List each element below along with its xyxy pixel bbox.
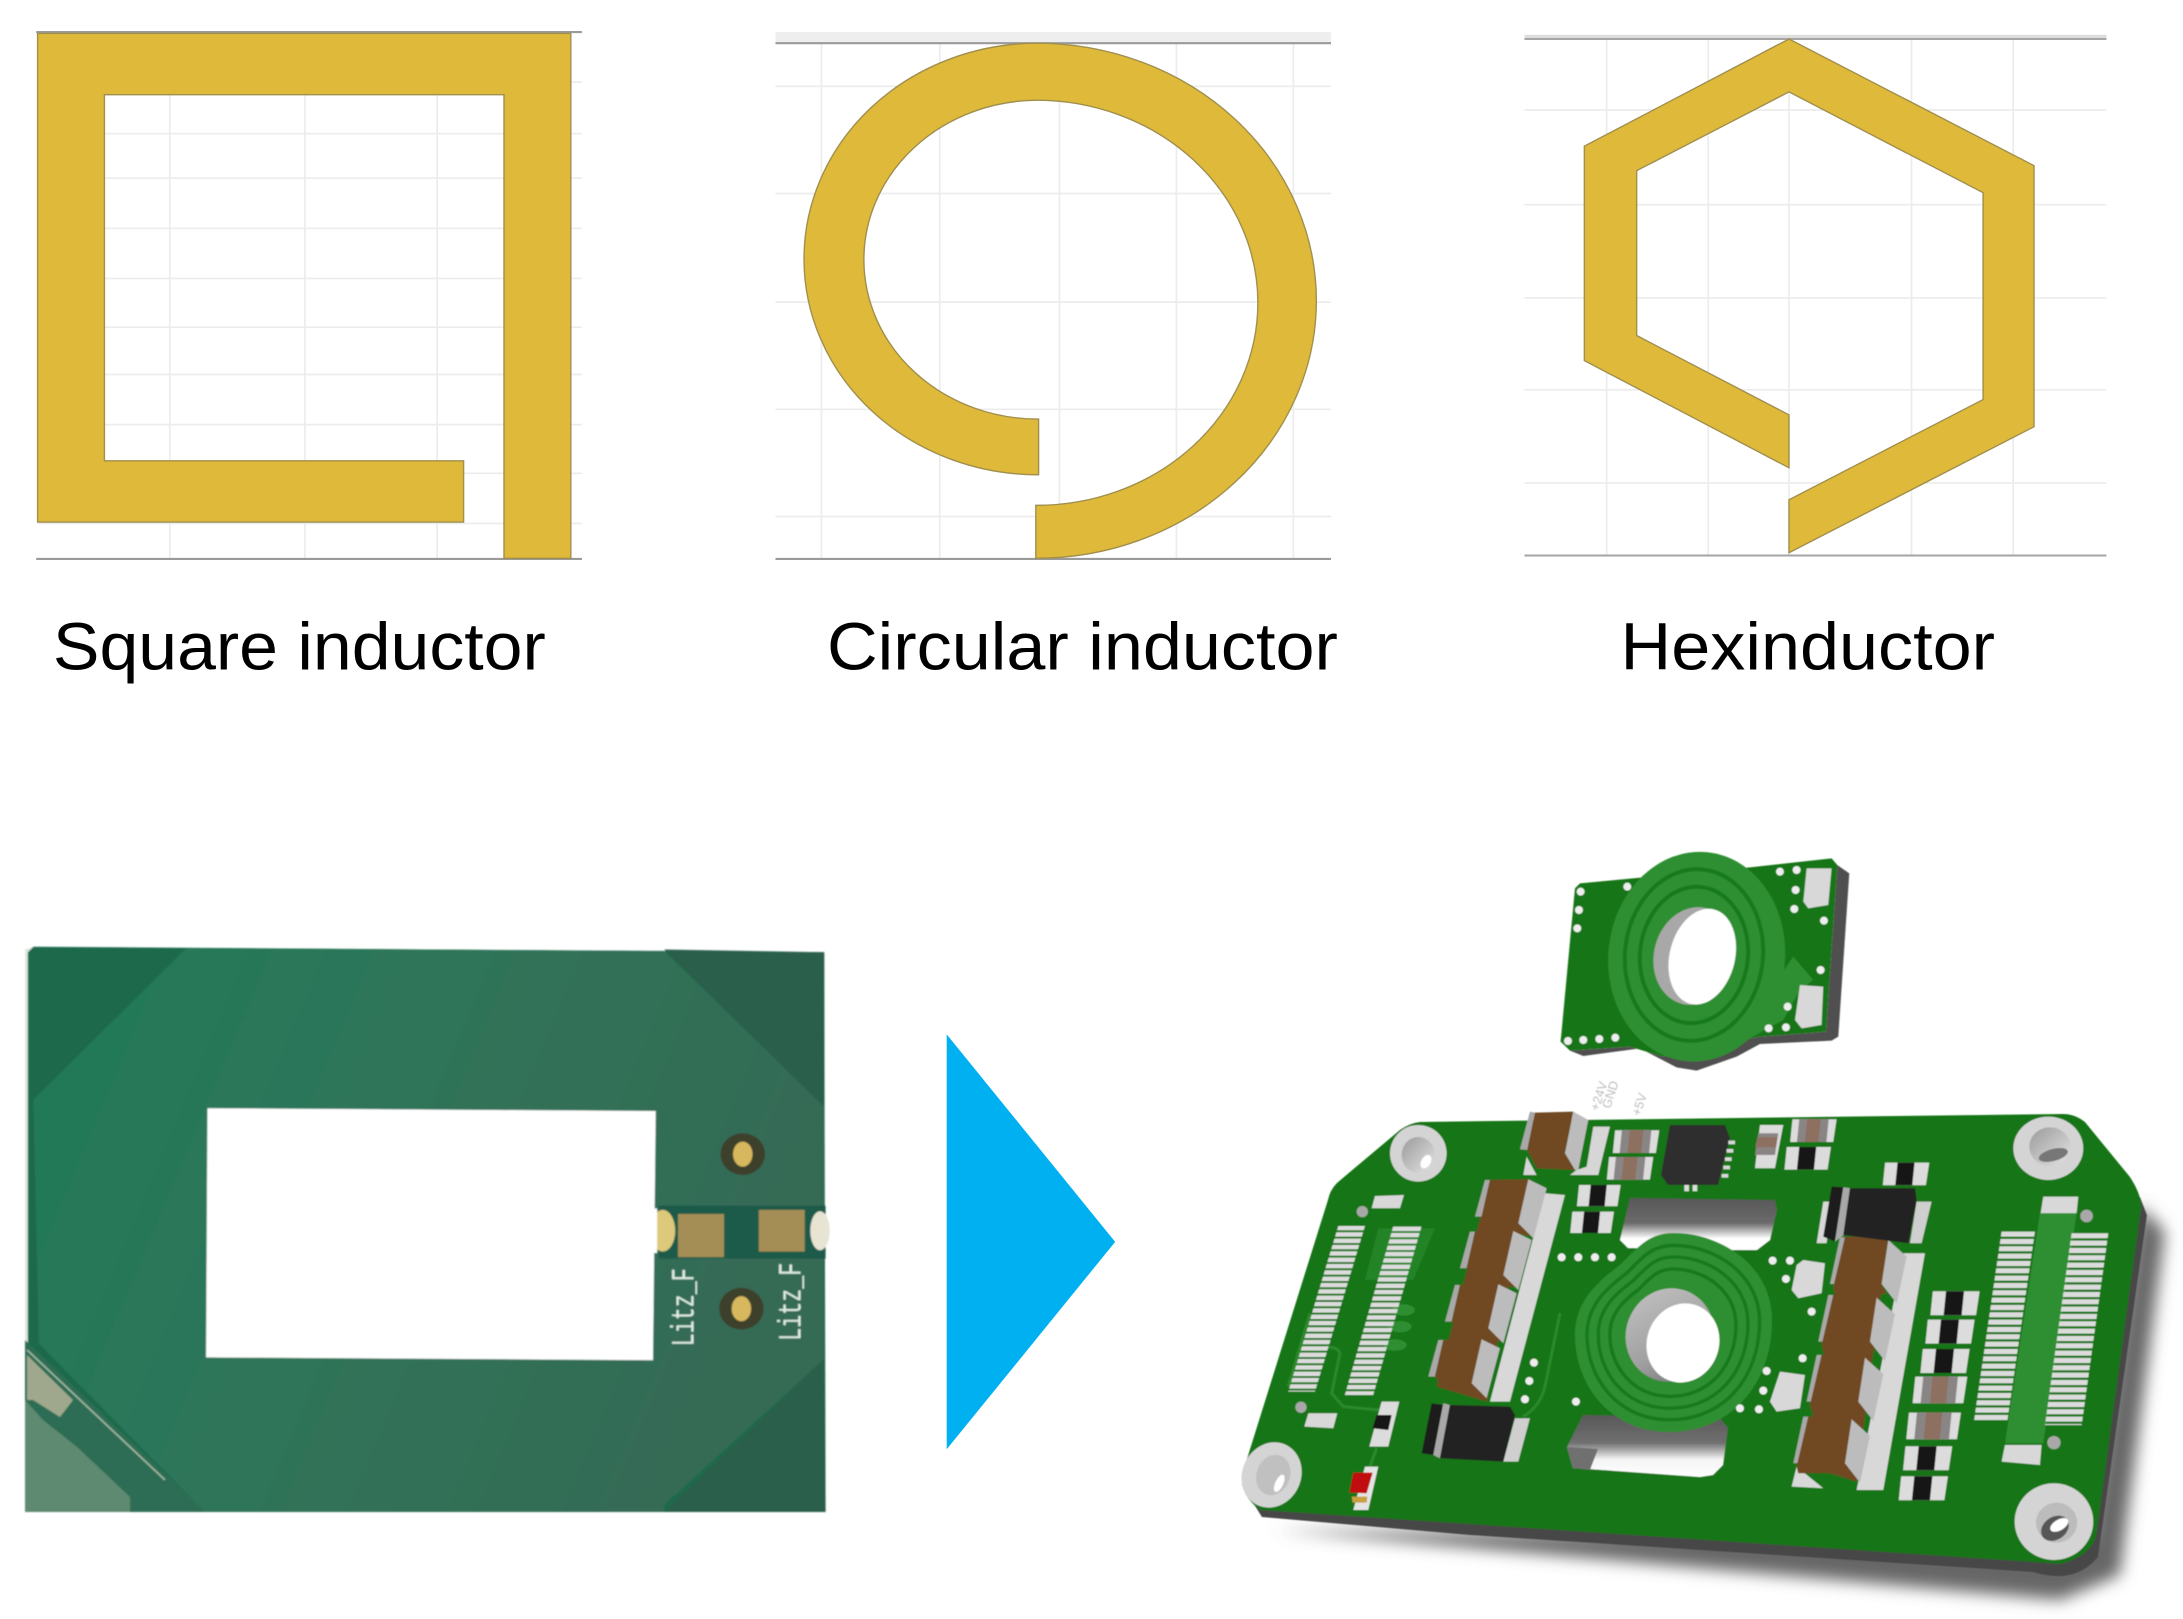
tiny connector labels <box>1588 1079 1650 1118</box>
silk and trace details <box>1288 1228 1560 1467</box>
left capacitor strip <box>1490 1193 1565 1402</box>
render: 3D PCB assembly <box>1231 843 2165 1600</box>
small pads and dots <box>1295 1195 1616 1428</box>
right half hole <box>810 1211 830 1250</box>
left half hole <box>649 1208 675 1253</box>
right capacitor column <box>1793 1237 1907 1483</box>
module pads <box>1795 868 1832 1028</box>
top right dark corner <box>664 949 824 1107</box>
label: circular inductor: Circular inductor <box>827 611 1338 685</box>
module coil <box>1598 843 1813 1070</box>
left capacitor column <box>1428 1179 1547 1398</box>
center coil <box>1575 1233 1772 1432</box>
tiny connector labels: +5V <box>1629 1091 1650 1118</box>
hexagonal inductor axis lines <box>1524 35 2106 555</box>
IC pins lower <box>1684 1184 1697 1191</box>
center IC <box>1661 1125 1730 1185</box>
connector end pads <box>2002 1197 2093 1465</box>
bottom slot <box>1567 1415 1728 1477</box>
red LED <box>1349 1467 1378 1510</box>
left capacitor brown backing <box>1437 1179 1528 1402</box>
terminal band <box>659 1206 826 1259</box>
small SMD parts right <box>1784 1119 1980 1500</box>
drop shadow <box>1275 1205 2165 1600</box>
hexagonal inductor trace <box>1584 39 2034 553</box>
left half of board components <box>1231 1112 1697 1518</box>
center cutout <box>206 1108 656 1360</box>
circular inductor trace <box>804 43 1316 558</box>
right half of board components <box>1722 1117 2093 1560</box>
left connector combs <box>1302 1226 1407 1395</box>
right connector combs <box>1991 1213 2090 1443</box>
module hole opening <box>1659 902 1746 1012</box>
bottom left glare corner <box>25 1340 205 1512</box>
mounting hole bottom left <box>1231 1432 1312 1518</box>
module vias <box>1564 866 1828 1045</box>
left pad <box>678 1214 724 1257</box>
upper via <box>720 1133 765 1175</box>
top slot <box>1620 1198 1777 1250</box>
panel: square inductor <box>36 32 582 559</box>
lower via <box>719 1288 764 1330</box>
arrow <box>947 1034 1115 1449</box>
right MOSFET <box>1817 1187 1932 1243</box>
circular inductor axis lines <box>775 32 1331 559</box>
octagonal coil layer <box>33 948 824 1512</box>
square inductor trace <box>38 33 571 558</box>
silkscreen right: Litz_F <box>774 1263 811 1341</box>
hexagonal inductor grid <box>1524 39 2106 555</box>
silkscreen left: Litz_F <box>666 1268 703 1346</box>
board base <box>28 947 826 1512</box>
coil hole opening <box>1635 1293 1730 1393</box>
right capacitor bottom pad <box>1792 1467 1823 1488</box>
mounting hole top left <box>1380 1115 1457 1192</box>
module side <box>1570 865 1849 1071</box>
mounting hole bottom right <box>2015 1483 2093 1560</box>
tiny connector labels: +24V <box>1588 1079 1611 1113</box>
vertical SMD part <box>1755 1125 1783 1168</box>
top capacitor <box>1520 1112 1610 1175</box>
left MOSFET <box>1422 1403 1530 1462</box>
main board top <box>1242 1114 2141 1564</box>
panel: circular inductor <box>775 32 1331 559</box>
tiny connector labels: GND <box>1599 1079 1622 1110</box>
module hole <box>1643 898 1745 1014</box>
circular inductor grid <box>775 43 1331 558</box>
label: hexinductor: Hexinductor <box>1621 611 1995 685</box>
board edge highlight <box>25 947 33 1512</box>
right capacitor strip <box>1857 1253 1925 1490</box>
mounting hole top right <box>2013 1117 2083 1180</box>
small module <box>1561 843 1849 1118</box>
photo: fabricated PCB coil <box>25 947 830 1512</box>
main board side <box>1242 1197 2147 1576</box>
small SMD parts left <box>1570 1130 1659 1233</box>
right pad <box>759 1210 805 1252</box>
panel: hexagonal inductor <box>1524 35 2106 555</box>
diode <box>1369 1402 1399 1447</box>
coil hole <box>1613 1276 1727 1394</box>
large pads and vias <box>1736 1257 1825 1413</box>
square inductor grid <box>38 33 582 558</box>
label: square inductor: Square inductor <box>53 611 546 685</box>
bottom right dark corner <box>664 1359 826 1512</box>
square inductor axis lines <box>36 32 582 559</box>
module board <box>1561 858 1837 1057</box>
IC pins right <box>1722 1141 1735 1178</box>
right capacitor brown backing <box>1803 1237 1888 1482</box>
